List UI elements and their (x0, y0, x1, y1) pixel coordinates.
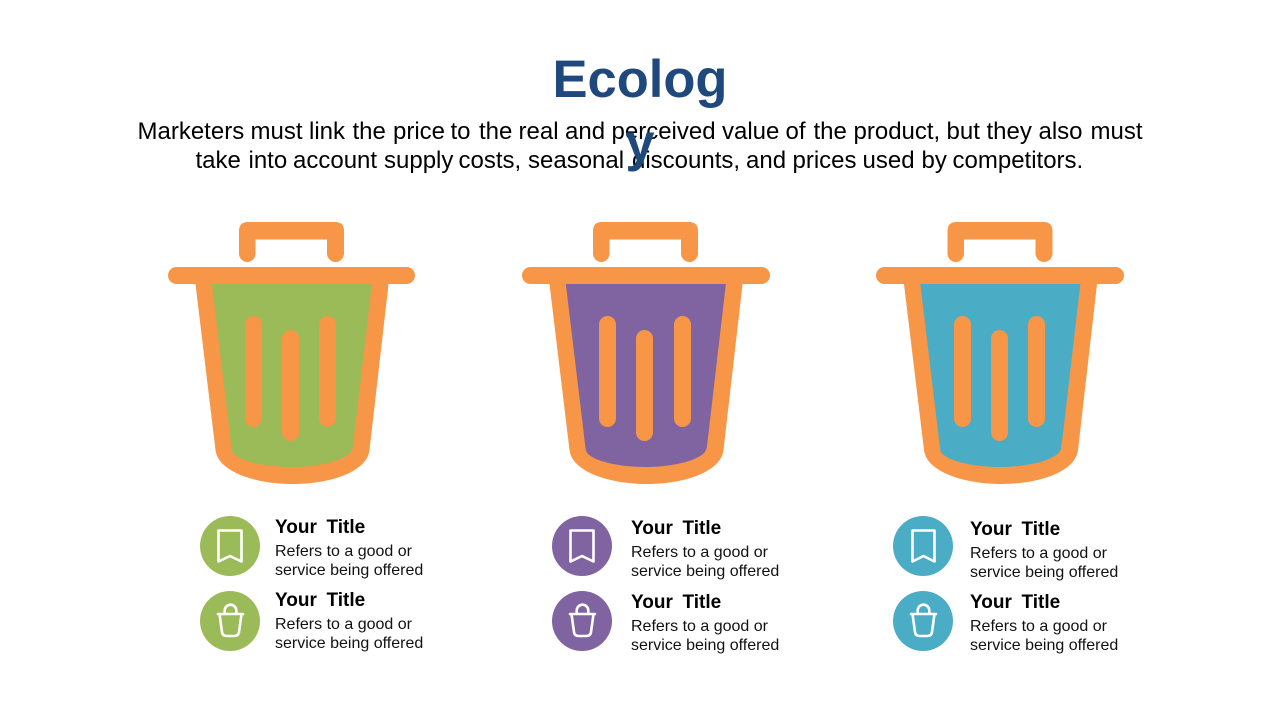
intro paragraph: discounts, (632, 147, 740, 174)
intro paragraph: prices (792, 147, 857, 174)
intro paragraph: to (450, 118, 471, 145)
intro paragraph: and (746, 147, 786, 174)
intro paragraph: and (565, 118, 605, 145)
text: green item 2: Title (326, 590, 365, 611)
intro paragraph: supply (384, 147, 453, 174)
text: green item 2: Your (275, 590, 317, 611)
text: blue item 2: Title (1022, 592, 1060, 613)
text: purple item 2: service being offered (631, 637, 779, 654)
intro paragraph: into (248, 147, 287, 174)
intro paragraph: price (393, 118, 445, 145)
text: blue item 2: service being offered (970, 637, 1118, 654)
text: green item 1: Refers to a good or (275, 543, 413, 560)
intro paragraph: costs, (458, 147, 521, 174)
text: purple item 1: Your (631, 518, 673, 539)
intro paragraph: also (1038, 118, 1083, 145)
text: blue item 1: Refers to a good or (970, 545, 1108, 562)
intro paragraph: competitors. (952, 147, 1083, 174)
text: purple item 1 (631, 518, 779, 580)
panel: green column items (200, 516, 423, 652)
intro paragraph: Marketers (138, 118, 244, 145)
intro paragraph: must (250, 118, 303, 145)
icon: purple bookmark badge (552, 516, 612, 576)
text: blue item 1: Your (970, 519, 1012, 540)
text: purple item 2: Title (682, 592, 721, 613)
text: blue item 1 (970, 519, 1118, 581)
title (552, 50, 728, 172)
text: blue item 1: service being offered (970, 564, 1118, 581)
icon: green bag badge (200, 591, 260, 651)
intro paragraph: but (946, 118, 980, 145)
intro paragraph: by (922, 147, 947, 174)
text: purple item 1: Title (682, 518, 721, 539)
text: green item 1 (275, 517, 423, 579)
intro paragraph: of (786, 118, 806, 145)
intro paragraph: account (293, 147, 377, 174)
icon: green trash can (168, 222, 415, 484)
intro paragraph: perceived (612, 118, 716, 145)
icon: blue bookmark badge (893, 516, 953, 576)
title: Ecolog (552, 50, 728, 109)
intro paragraph: value (722, 118, 779, 145)
text: blue item 2: Refers to a good or (970, 618, 1108, 635)
intro paragraph: product, (854, 118, 940, 145)
intro paragraph: the (479, 118, 512, 145)
text: green item 2 (275, 590, 423, 652)
panel: purple column items (552, 516, 779, 654)
intro paragraph: real (518, 118, 559, 145)
intro paragraph: must (1090, 118, 1143, 145)
text: blue item 2: Your (970, 592, 1012, 613)
text: purple item 1: service being offered (631, 563, 779, 580)
text: purple item 2: Refers to a good or (631, 618, 769, 635)
icon: purple trash can (522, 222, 770, 484)
title: y (625, 114, 655, 172)
intro paragraph (138, 118, 1143, 174)
intro paragraph: the (814, 118, 847, 145)
text: blue item 1: Title (1022, 519, 1060, 540)
icon: blue trash can (876, 222, 1124, 484)
text: green item 2: service being offered (275, 635, 423, 652)
intro paragraph: link (309, 118, 346, 145)
intro paragraph: used (862, 147, 915, 174)
icon: blue bag badge (893, 591, 953, 651)
text: green item 1: Your (275, 517, 317, 538)
text: purple item 2 (631, 592, 779, 654)
text: blue item 2 (970, 592, 1118, 654)
text: green item 1: Title (326, 517, 365, 538)
intro paragraph: they (986, 118, 1032, 145)
panel: blue column items (893, 516, 1118, 654)
intro paragraph: take (196, 147, 241, 174)
text: green item 2: Refers to a good or (275, 616, 413, 633)
text: green item 1: service being offered (275, 562, 423, 579)
text: purple item 2: Your (631, 592, 673, 613)
icon: green bookmark badge (200, 516, 260, 576)
intro paragraph: the (352, 118, 386, 145)
intro paragraph: seasonal (528, 147, 624, 174)
text: purple item 1: Refers to a good or (631, 544, 769, 561)
icon: purple bag badge (552, 591, 612, 651)
